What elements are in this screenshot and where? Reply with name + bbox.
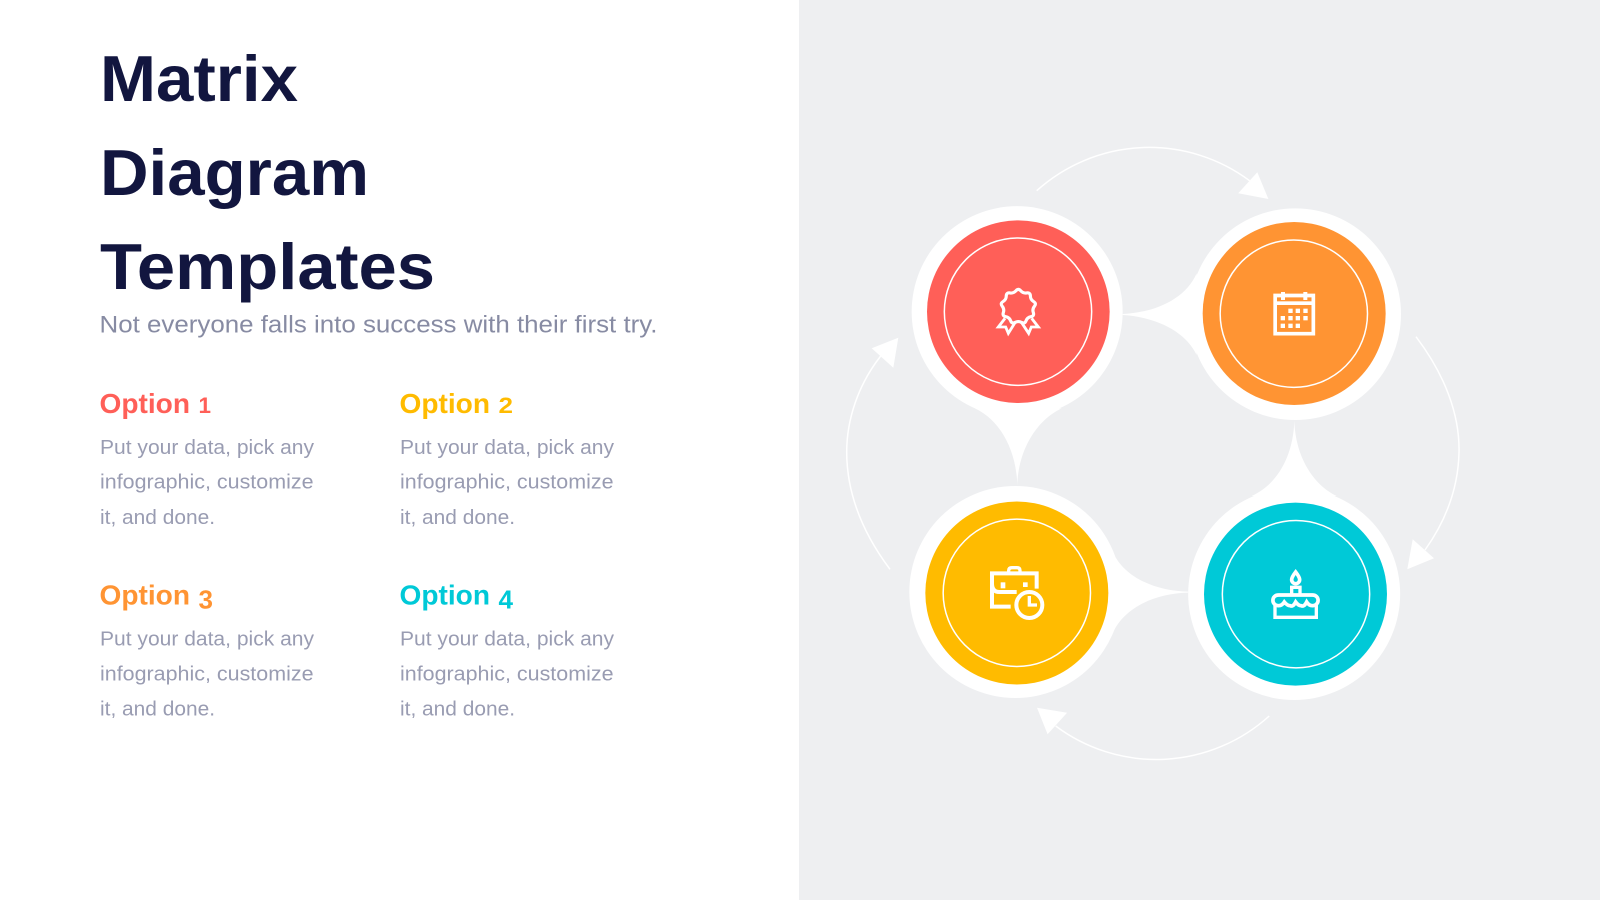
text block: option 4: infographic, customize [400, 664, 614, 686]
text block: option 3: it, and done. [100, 698, 215, 720]
arrow: bottom, cyan to yellow [1037, 708, 1269, 760]
heading: option 3: Option [100, 580, 190, 610]
panel: option 4 [400, 580, 614, 720]
icon: award ribbon [998, 289, 1038, 333]
node: orange calendar [1123, 208, 1401, 420]
matrix diagram: four droplet nodes [909, 206, 1401, 700]
arrow: left, yellow to red [847, 338, 898, 569]
icon: birthday cake [1273, 572, 1318, 617]
arrow: top, red to orange [1037, 147, 1268, 199]
node: cyan cake [1188, 421, 1400, 700]
text block: option 3: Put your data, pick any [100, 628, 314, 650]
text block: option 1: infographic, customize [100, 472, 314, 494]
text block: option 2: Put your data, pick any [400, 437, 614, 459]
text block: option 2: it, and done. [400, 507, 515, 529]
title: Templates [100, 230, 435, 303]
node: red award [912, 206, 1123, 486]
heading: option 1: Option [100, 388, 190, 419]
text block: option 4: Put your data, pick any [400, 628, 614, 650]
panel: option 2 [400, 388, 614, 529]
node: yellow briefcase [909, 486, 1188, 698]
heading: option 1: 1 [198, 393, 211, 418]
text block: option 1: it, and done. [100, 507, 215, 529]
arrow: right, orange to cyan [1407, 337, 1459, 569]
heading: option 2: Option [400, 388, 490, 419]
panel: grey diagram background [799, 0, 1600, 900]
text block: option 2: infographic, customize [400, 472, 614, 494]
panel: option 3 [100, 580, 314, 720]
icon: briefcase with clock [992, 568, 1042, 618]
heading: option 4: Option [400, 580, 490, 610]
text block: option 4 [400, 628, 614, 720]
subtitle: Not everyone falls into success with their first try. [100, 312, 658, 339]
heading: option 2: 2 [498, 393, 513, 418]
title: Diagram [100, 136, 369, 209]
title [100, 42, 435, 303]
title: Matrix [100, 42, 298, 115]
text block: option 4: it, and done. [400, 698, 515, 720]
text block: option 1 [100, 437, 314, 529]
text block: option 3: infographic, customize [100, 664, 314, 686]
text block: option 1: Put your data, pick any [100, 437, 314, 459]
text block: option 3 [100, 628, 314, 720]
icon: calendar [1275, 292, 1313, 334]
heading: option 3: 3 [198, 584, 213, 614]
text block: option 2 [400, 437, 614, 529]
heading: option 4: 4 [498, 584, 514, 614]
panel: option 1 [100, 388, 314, 529]
